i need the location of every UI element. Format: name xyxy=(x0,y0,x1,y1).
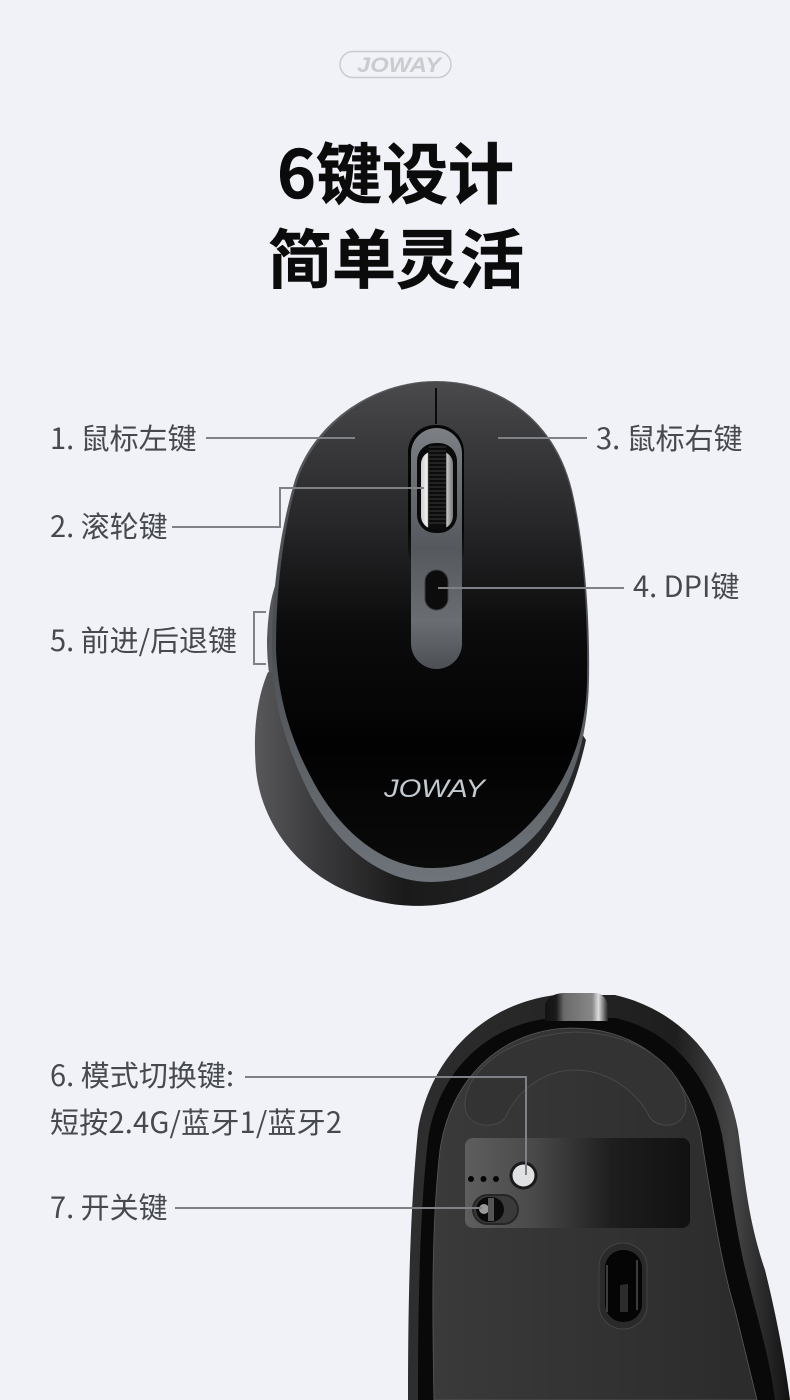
title xyxy=(268,122,524,302)
JOWAY mouse logo: JOWAY xyxy=(383,775,488,803)
glossy shell xyxy=(276,382,587,868)
callout lines xyxy=(172,438,624,1208)
label 5: forward back: 5. 前进/后退键 xyxy=(50,618,237,660)
brand logo badge: JOWAY xyxy=(357,54,443,77)
label 7: power: 7. 开关键 xyxy=(50,1185,168,1227)
scroll wheel xyxy=(417,443,457,533)
indicator dots xyxy=(468,1176,499,1182)
title: 6键设计 xyxy=(277,122,514,218)
side buttons xyxy=(267,574,285,690)
mode button xyxy=(510,1162,538,1190)
mouse top view xyxy=(255,381,589,906)
label 1: left button: 1. 鼠标左键 xyxy=(50,416,197,458)
mouse feet xyxy=(465,1032,686,1125)
side button xyxy=(742,1215,752,1265)
label 4: DPI: 4. DPI键 xyxy=(633,564,739,606)
optical sensor xyxy=(599,1243,647,1329)
label 2: wheel: 2. 滚轮键 xyxy=(50,504,168,546)
base plate xyxy=(433,1028,757,1400)
DPI button xyxy=(425,570,448,610)
gray rim xyxy=(272,381,589,882)
title: 简单灵活 xyxy=(268,210,524,302)
center seam xyxy=(435,388,437,424)
mouse base xyxy=(255,672,586,906)
label 6 description: 短按2.4G/蓝牙1/蓝牙2 xyxy=(50,1100,342,1142)
black band xyxy=(418,1018,775,1400)
scroll wheel edge xyxy=(545,993,608,1021)
scroll strip xyxy=(408,425,464,575)
label sticker xyxy=(465,1138,690,1228)
power switch xyxy=(473,1195,518,1224)
mouse bottom view xyxy=(408,993,790,1400)
label 3: right button: 3. 鼠标右键 xyxy=(596,416,743,458)
outer body xyxy=(408,995,790,1400)
brand logo badge xyxy=(340,52,451,78)
label 6: mode: 6. 模式切换键: xyxy=(50,1053,234,1095)
